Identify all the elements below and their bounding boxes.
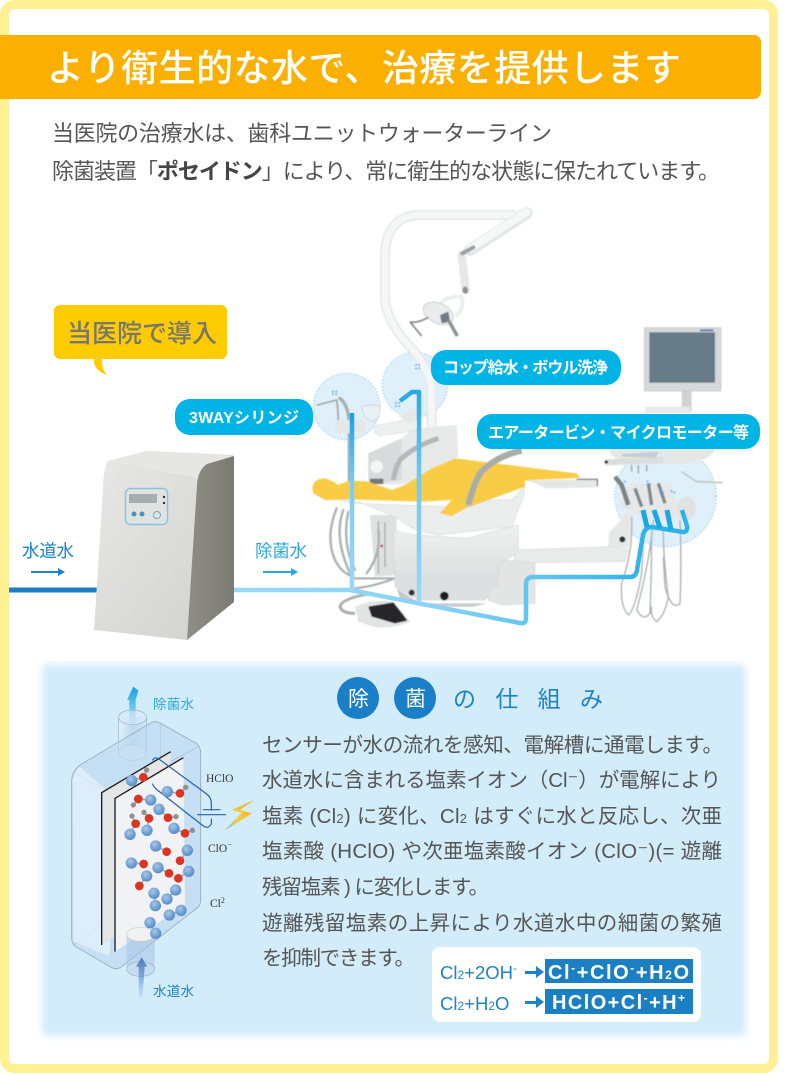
chemical formula box (432, 947, 701, 1022)
label: air turbine and micromotor: エアータービン・マイクロモーター等 (488, 423, 749, 442)
electrolysis cell diagram (72, 687, 254, 999)
chemical formula box: HClO+Cl (552, 992, 642, 1014)
diagram labels: − (227, 840, 232, 849)
chemical formula box: +ClO (577, 962, 629, 984)
sterilizer device (94, 451, 234, 640)
spittoon and column (362, 403, 458, 485)
tank (72, 722, 201, 969)
dental lamp (410, 298, 457, 336)
diagram labels: HClO (206, 773, 233, 785)
panel heading: 菌 (405, 688, 426, 711)
panel: how sterilisation works (42, 664, 746, 1036)
panel heading (337, 677, 603, 719)
arm rest (468, 451, 522, 505)
handpiece holder (615, 477, 696, 520)
explanation text: 水道水に含まれる塩素イオン（Cl⁻）が電解により (262, 769, 721, 792)
chemical formula box: Cl (548, 962, 570, 984)
bottom pipe (127, 927, 155, 976)
explanation text (262, 734, 723, 970)
water line: tap water in (9, 588, 97, 592)
device control panel (126, 488, 168, 524)
diagram labels: 除菌水 (153, 697, 194, 712)
hanging hoses (621, 517, 681, 622)
label: sterilised water with arrow (255, 541, 307, 576)
label: tap water with arrow (22, 541, 74, 576)
chemical formula box: + (678, 991, 685, 1005)
label: 3WAY syringe: 3WAYシリンジ (189, 410, 299, 427)
monitor (644, 328, 721, 412)
tray (605, 448, 723, 483)
top pipe (119, 710, 147, 760)
explanation text: 塩素酸 (HClO) や次亜塩素酸イオン (ClO⁻)(= 遊離 (262, 840, 722, 863)
label: 3WAY syringe (175, 399, 313, 435)
panel heading: 除 (348, 688, 369, 711)
chemical formula box: Cl2+H2O (440, 993, 509, 1014)
chemical formula box: +H (636, 962, 664, 984)
light arm pole (385, 212, 527, 428)
title banner: より衛生的な水で、治療を提供します (47, 48, 681, 89)
explanation text: センサーが水の流れを感知、電解槽に通電します。 (262, 734, 723, 757)
side arm and post (488, 512, 633, 605)
chair base (333, 479, 598, 607)
molecule bonds (130, 770, 192, 933)
label: cup water and bowl wash (431, 350, 621, 385)
callout: 当医院で導入 (54, 305, 227, 375)
chemical formula box: +H (649, 992, 677, 1014)
explanation text: 残留塩素 ) に変化します。 (262, 876, 489, 899)
diagram labels: Cl (210, 898, 221, 910)
foot pedal (340, 593, 410, 627)
callout: 当医院で導入: 当医院で導入 (67, 320, 217, 348)
decorative water spray (332, 364, 675, 493)
hydrogen atoms (129, 767, 195, 833)
diagram labels: 2 (221, 896, 225, 905)
wires and capacitor (153, 758, 226, 827)
chemical formula box: - (630, 961, 634, 975)
explanation text: 塩素 (Cl2) に変化、Cl2 はすぐに水と反応し、次亜 (262, 805, 722, 828)
panel heading: の仕組み (453, 686, 603, 712)
label: cup water and bowl wash: コップ給水・ボウル洗浄 (443, 358, 608, 377)
label: tap water with arrow: 水道水 (22, 541, 74, 561)
explanation text: 遊離残留塩素の上昇により水道水中の細菌の繁殖 (262, 912, 722, 935)
chlorine atoms (124, 775, 194, 939)
lightning bolt (224, 800, 254, 831)
outflow arrow (127, 687, 138, 725)
chemical formula box: Cl2+2OH (440, 962, 513, 983)
diagram labels (153, 697, 233, 999)
diagram labels: 水道水 (153, 984, 194, 999)
label: air turbine and micromotor (477, 414, 760, 449)
chair seat (312, 458, 580, 516)
chemical formula box: - (571, 961, 575, 975)
chemical formula box: - (644, 991, 648, 1005)
intro text: 除菌装置「ポセイドン」により、常に衛生的な状態に保たれています。 (52, 159, 720, 184)
intro text: 当医院の治療水は、歯科ユニットウォーターライン (52, 121, 552, 146)
electrode plates (102, 752, 185, 952)
intro text (52, 121, 720, 184)
chemical formula box: 2O (665, 962, 689, 984)
inflow arrow (136, 957, 147, 999)
left hoses and handpieces (317, 398, 397, 588)
dental chair unit illustration (312, 212, 723, 627)
diagram labels: ClO (208, 843, 227, 855)
label: sterilised water with arrow: 除菌水 (255, 541, 307, 561)
highlight circles (313, 352, 716, 547)
title banner (0, 35, 761, 99)
oxygen atoms (131, 773, 189, 890)
chemical formula box: - (513, 963, 517, 975)
water line: sterilised water to chair (230, 392, 687, 623)
explanation text: を抑制できます。 (262, 947, 415, 970)
